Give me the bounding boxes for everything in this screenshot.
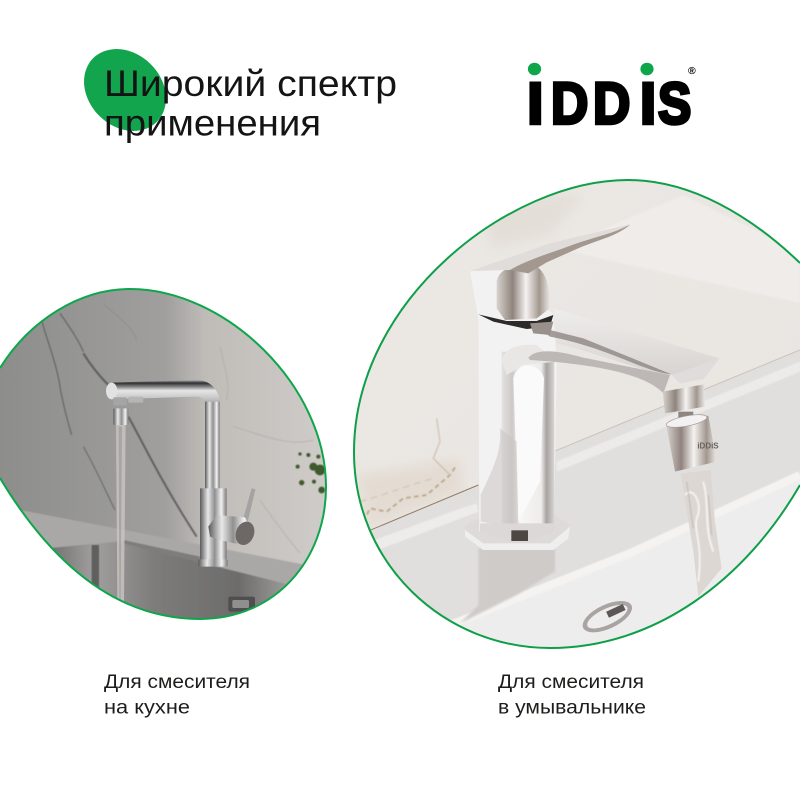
logo: IDDIS: S bbox=[658, 72, 691, 136]
aerator logo: iDDiS bbox=[697, 441, 719, 450]
title accent blob bbox=[67, 32, 183, 148]
water stream bbox=[681, 470, 722, 597]
water stream bbox=[116, 424, 126, 602]
logo: IDDIS: I bbox=[640, 72, 656, 136]
overflow bbox=[582, 601, 632, 632]
marble stains bbox=[357, 195, 583, 528]
cartridge bbox=[497, 265, 550, 320]
logo: IDDIS: D bbox=[593, 71, 630, 136]
caption: basin: в умывальнике bbox=[498, 696, 646, 718]
aerator bbox=[113, 397, 127, 405]
countertop bbox=[22, 510, 302, 584]
drain slot bbox=[228, 597, 255, 612]
plant bbox=[296, 452, 325, 493]
caption: basin: Для смесителя bbox=[498, 671, 644, 693]
title bbox=[104, 63, 397, 144]
caption: kitchen: Для смесителя bbox=[104, 671, 250, 693]
caption: kitchen bbox=[104, 671, 250, 718]
aerator adapter bbox=[663, 384, 705, 413]
title: Широкий спектр bbox=[104, 63, 397, 104]
reflection on basin bbox=[460, 548, 555, 623]
lever bbox=[244, 488, 256, 522]
faucet column bbox=[470, 261, 557, 532]
faucet spout bbox=[112, 380, 220, 405]
logo: IDDIS: D bbox=[551, 71, 588, 136]
logo: IDDIS: I bbox=[527, 72, 543, 136]
faucet body bbox=[200, 488, 227, 563]
lever bbox=[471, 224, 631, 271]
title: применения bbox=[104, 102, 321, 144]
marble veins kitchen bbox=[42, 303, 313, 553]
photo: basin faucet bbox=[350, 175, 800, 655]
caption: kitchen: на кухне bbox=[104, 696, 190, 718]
handle bbox=[208, 516, 248, 545]
logo: IDDIS bbox=[527, 63, 696, 137]
caption: basin bbox=[498, 671, 646, 718]
base plate bbox=[465, 515, 570, 550]
tile band bbox=[557, 195, 800, 303]
logo: IDDIS: ® bbox=[688, 65, 696, 77]
basin bbox=[372, 351, 800, 620]
spout bbox=[563, 344, 718, 374]
photo: kitchen faucet bbox=[0, 285, 330, 630]
sink basin bbox=[47, 542, 287, 623]
